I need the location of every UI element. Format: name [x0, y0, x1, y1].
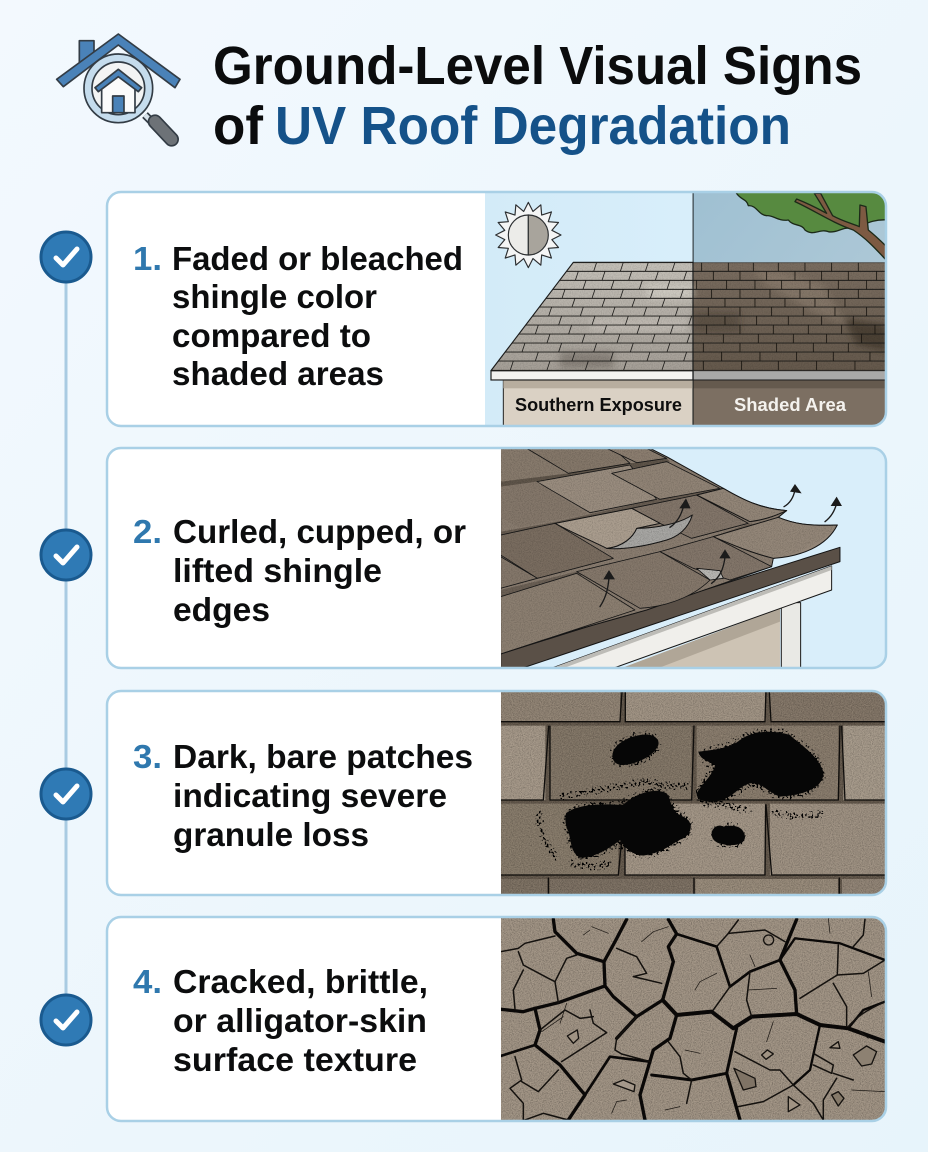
illustration: cracked shingle surface — [500, 917, 890, 1123]
wall and labels background — [503, 380, 693, 427]
sign 3 text: Dark, bare patches — [173, 738, 473, 775]
sign 3 text: indicating severe — [173, 777, 447, 814]
sign 1 text: shaded areas — [172, 355, 384, 392]
title — [213, 36, 862, 156]
center divider — [692, 193, 694, 425]
illustration: sun versus shade roof comparison — [485, 188, 890, 428]
sunlit roof section — [491, 262, 693, 371]
icon: check badge 4 — [41, 995, 91, 1045]
thick cracks — [501, 919, 885, 1120]
sign 1 text: Faded or bleached — [172, 240, 463, 277]
sign 1 text — [133, 240, 463, 392]
title: of — [213, 96, 264, 156]
white fascia board — [547, 566, 832, 670]
sign 1 text: 1. — [133, 240, 162, 277]
panel: sign 1 faded shingles — [107, 188, 890, 428]
panel: sign 4 alligator cracking — [107, 917, 890, 1123]
illustration: curled shingles at roof edge — [501, 447, 891, 670]
sign 3 text — [133, 738, 473, 853]
icon: check badge 2 — [41, 530, 91, 580]
sign 3 text: granule loss — [173, 816, 369, 853]
shingle joints shaded — [697, 262, 877, 370]
shingle tabs — [501, 690, 887, 897]
sign 2 text — [133, 513, 466, 628]
icon: check badge 1 — [41, 232, 91, 282]
shingle lines — [501, 692, 887, 897]
sign 2 text: 2. — [133, 513, 162, 550]
icon: check badge 3 — [41, 769, 91, 819]
sign 2 text: lifted shingle — [173, 552, 382, 589]
dark drip edge — [501, 547, 840, 670]
shingle field — [501, 447, 837, 654]
sign 1 text: compared to — [172, 317, 371, 354]
timeline connector — [64, 257, 68, 1020]
scattered granule specks — [539, 782, 823, 866]
fascia — [491, 371, 693, 380]
icon: half shaded sun — [496, 202, 561, 268]
sign 4 text: Cracked, brittle, — [173, 963, 428, 1000]
shingle joints sunlit — [510, 262, 692, 370]
label: southern exposure: Southern Exposure — [515, 395, 682, 415]
shaded roof section — [693, 262, 890, 371]
sign 4 text — [133, 963, 428, 1078]
label: shaded area: Shaded Area — [734, 395, 847, 415]
sign 4 text: 4. — [133, 963, 162, 1000]
thin cracks — [542, 918, 885, 1113]
wall and post — [625, 620, 780, 667]
medium cracks — [501, 919, 885, 1120]
sign 2 text: edges — [173, 591, 270, 628]
icon: house under magnifying glass — [57, 34, 180, 139]
sign 1 text: shingle color — [172, 278, 377, 315]
illustration: bare patches on shingles — [500, 690, 890, 897]
title: UV Roof Degradation — [275, 96, 791, 156]
shingle course lines — [490, 271, 890, 361]
sign 3 text: 3. — [133, 738, 162, 775]
sign 2 text: Curled, cupped, or — [173, 513, 466, 550]
title: Ground-Level Visual Signs — [213, 36, 862, 96]
curled shingle underside — [607, 515, 692, 549]
bare patches with speckled halos — [565, 732, 823, 858]
sign 4 text: surface texture — [173, 1041, 417, 1078]
panel: sign 2 curled shingles — [107, 447, 891, 670]
tree branch and foliage — [736, 193, 885, 260]
flaked chips — [567, 935, 877, 1112]
sign 4 text: or alligator-skin — [173, 1002, 427, 1039]
lift arrows — [600, 490, 837, 607]
panel: sign 3 granule loss — [107, 690, 890, 897]
